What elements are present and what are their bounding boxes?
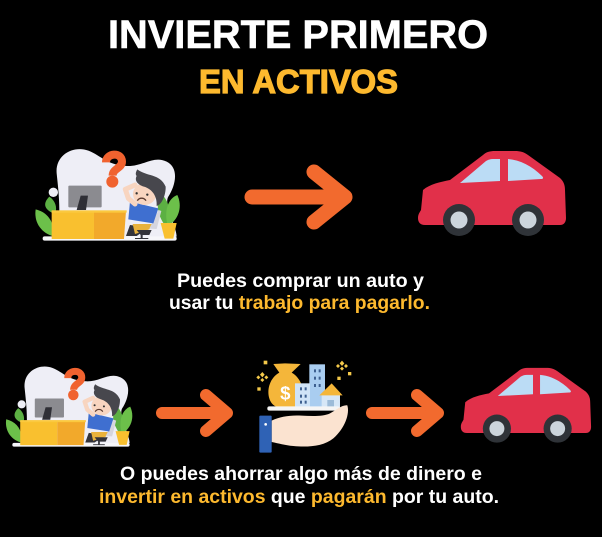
text block: second caption	[99, 464, 499, 508]
text block: second caption: invertir en activos que pagarán por tu auto.	[99, 487, 499, 508]
text block: second caption: O puedes ahorrar algo más de dinero e	[120, 464, 482, 485]
subtitle: EN ACTIVOS	[199, 63, 398, 100]
arrow: top row	[252, 172, 345, 222]
title: INVIERTE PRIMERO	[108, 13, 488, 57]
text block: first caption: usar tu trabajo para pagarlo.	[169, 293, 430, 314]
icon: red car, bottom row	[461, 368, 591, 443]
icon: red car, top row	[418, 151, 566, 236]
icon: worried worker at desk, top row	[35, 149, 180, 241]
arrow: bottom row, first	[162, 395, 227, 431]
text block: first caption	[169, 271, 430, 314]
arrow: bottom row, second	[372, 395, 438, 431]
text block: first caption: Puedes comprar un auto y	[177, 271, 424, 292]
icon: hand holding money and property: $	[280, 382, 291, 403]
icon: worried worker at desk, bottom row	[6, 366, 132, 447]
icon: hand holding money and property	[256, 361, 351, 453]
